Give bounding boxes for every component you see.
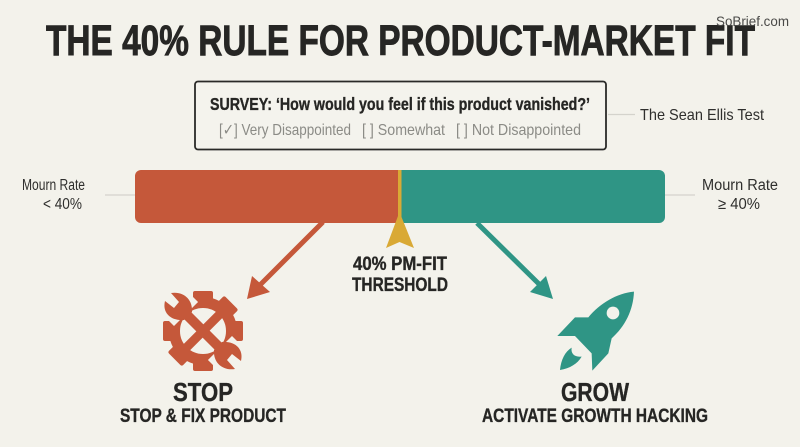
threshold label: THRESHOLD [352,275,448,296]
arrow: to stop [247,222,323,299]
icon: rocket [557,292,634,371]
label: the Sean Ellis test: The Sean Ellis Test [640,107,764,124]
stop heading: STOP [173,377,233,407]
threshold bar [135,170,665,223]
threshold pointer [386,212,414,248]
survey question: SURVEY: ‘How would you feel if this product vanished?’ [210,94,590,114]
panel: survey box [195,82,606,150]
threshold label: 40% PM-FIT [353,254,447,275]
survey options: [✓] Very Disappointed [219,122,351,139]
grow heading: GROW [561,377,629,407]
threshold label [352,254,448,296]
grow description: ACTIVATE GROWTH HACKING [482,406,708,427]
survey options: [ ] Not Disappointed [456,122,581,139]
label: mourn rate at least 40%: ≥ 40% [718,196,760,213]
survey options [219,122,581,139]
label: mourn rate below 40%: Mourn Rate [22,177,85,194]
stop description: STOP & FIX PRODUCT [120,406,286,427]
label: mourn rate below 40% [22,177,135,213]
watermark: SoBrief.com [716,14,789,29]
label: mourn rate at least 40% [665,177,778,213]
label: mourn rate at least 40%: Mourn Rate [702,177,778,194]
label: mourn rate below 40%: < 40% [43,196,82,213]
arrow: to grow [477,223,553,299]
icon: gear and wrenches [158,286,248,376]
survey options: [ ] Somewhat [362,122,445,139]
